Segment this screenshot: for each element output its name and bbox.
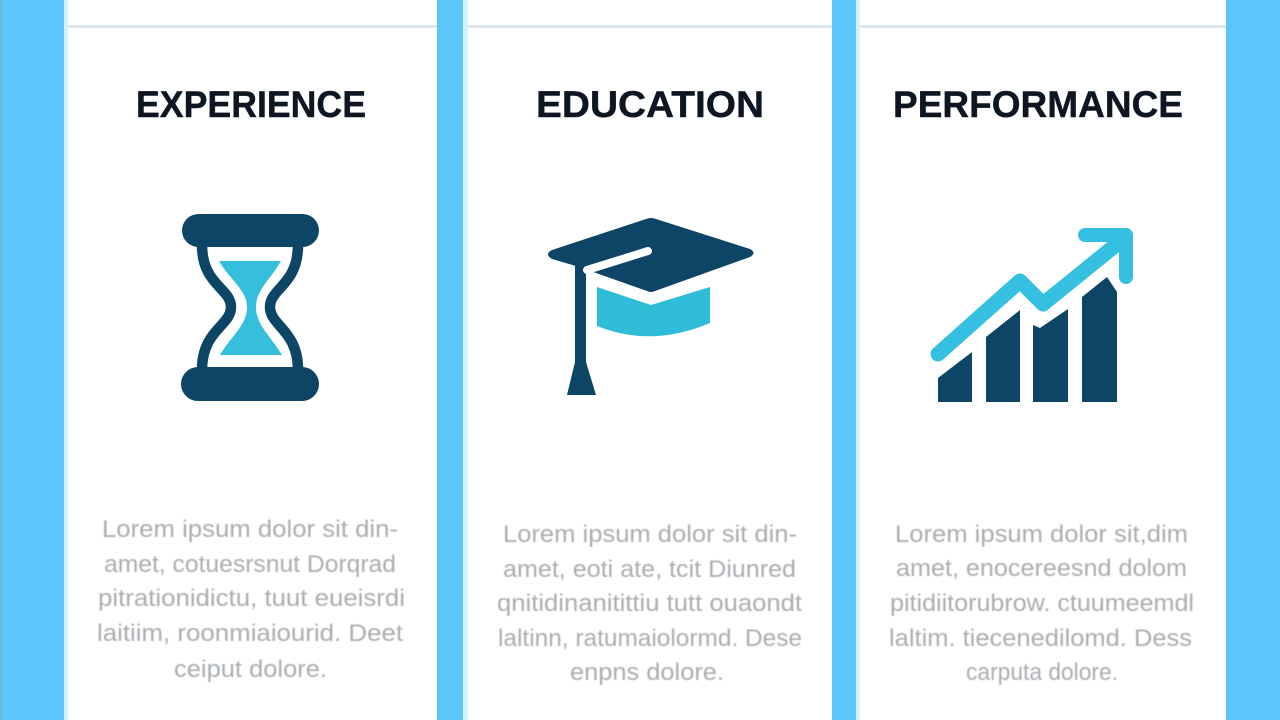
heading: experience: EXPERIENCE	[136, 84, 366, 125]
text block: performance	[889, 521, 1194, 686]
text block: performance: amet, enocereesnd dolom	[896, 555, 1187, 582]
text block: education: laltinn, ratumaiolormd. Dese	[498, 625, 802, 652]
heading: performance: PERFORMANCE	[893, 84, 1183, 125]
text block: education: qnitidinanitittiu tutt ouaondt	[497, 590, 802, 617]
icon: graduation cap	[548, 218, 754, 395]
text block: experience: Lorem ipsum dolor sit din-	[102, 516, 398, 543]
icon: growth chart	[938, 235, 1126, 402]
panel: performance	[856, 0, 1226, 720]
text block: education: amet, eoti ate, tcit Diunred	[503, 556, 796, 583]
text block: performance: carputa dolore.	[966, 659, 1118, 686]
text block: performance: pitidiitorubrow. ctuumeemdl	[890, 590, 1194, 617]
text block: experience: amet, cotuesrsnut Dorqrad	[104, 551, 396, 578]
panel: education	[463, 0, 832, 720]
text block: experience	[97, 516, 405, 683]
heading: education: EDUCATION	[536, 84, 764, 125]
text block: experience: ceiput dolore.	[174, 656, 327, 683]
text block: experience: pitrationidictu, tuut eueisrdi	[98, 585, 405, 612]
text block: experience: laitiim, roonmiaiourid. Deet	[97, 620, 403, 647]
text block: performance: laltim. tiecenedilomd. Dess	[889, 625, 1192, 652]
text block: education: enpns dolore.	[570, 659, 724, 686]
panel: experience	[64, 0, 437, 720]
icon: hourglass	[181, 214, 319, 401]
text block: education: Lorem ipsum dolor sit din-	[503, 521, 797, 548]
text block: performance: Lorem ipsum dolor sit,dim	[895, 521, 1188, 548]
text block: education	[497, 521, 802, 686]
